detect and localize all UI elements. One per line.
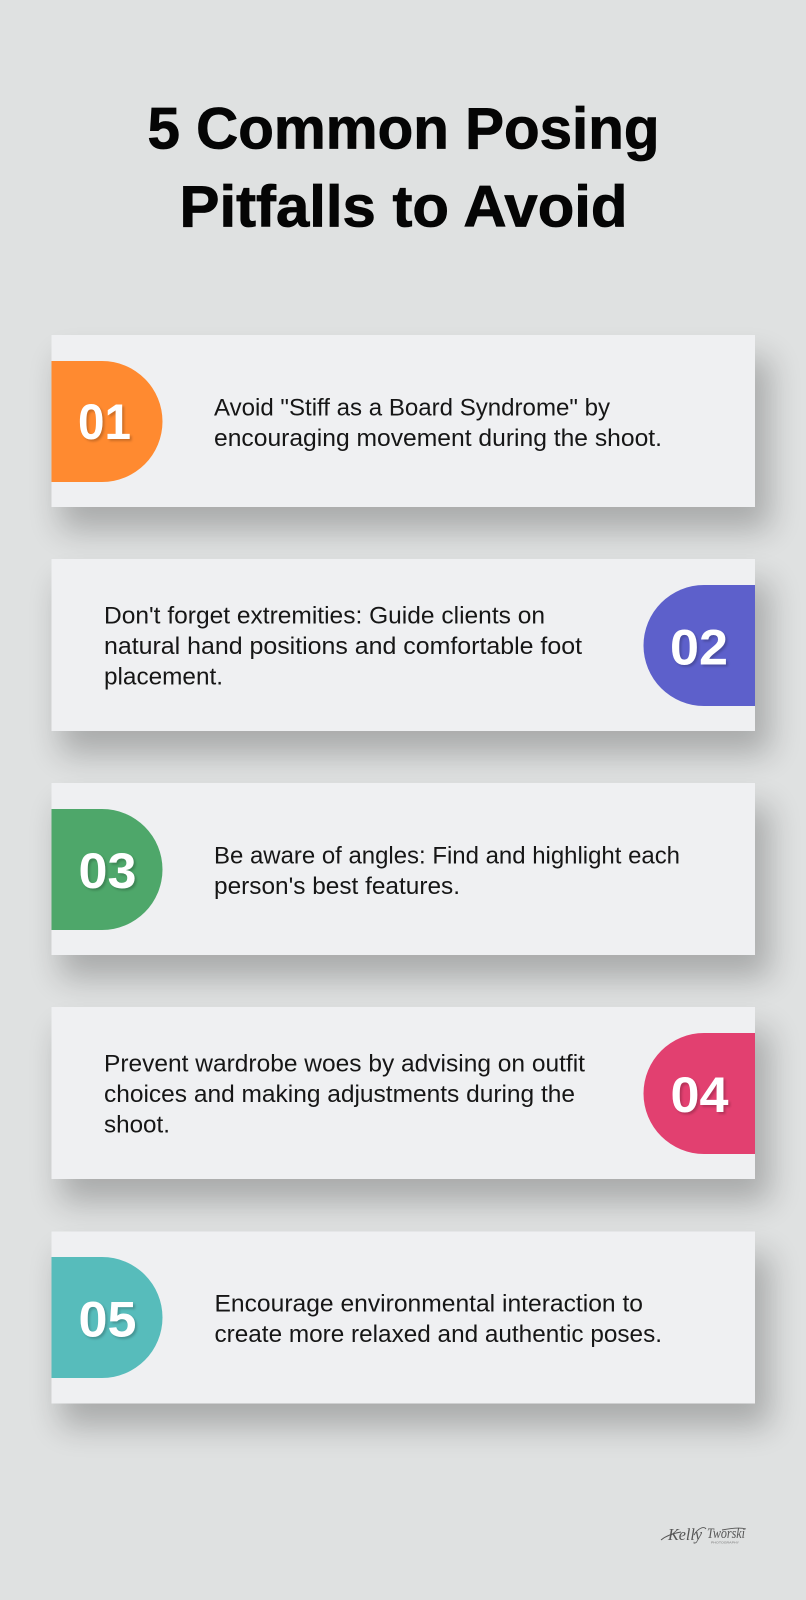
text: step 04 <box>104 1050 585 1138</box>
text: step 02: placement. <box>104 664 223 690</box>
panel: step 05 <box>52 1232 770 1426</box>
panel: step 04 <box>52 1007 770 1202</box>
text: step 04: choices and making adjustments during the <box>104 1081 575 1108</box>
title: Pitfalls to Avoid <box>180 175 628 240</box>
number: 03: 03 <box>78 843 136 899</box>
number: 02: 02 <box>670 620 728 676</box>
text: step 04: shoot. <box>104 1112 170 1138</box>
title: 5 Common Posing <box>148 96 660 161</box>
text: step 03 <box>214 842 680 900</box>
text: step 03: person's best features. <box>214 873 460 900</box>
logo: signature <box>661 1525 746 1544</box>
badge: 01 <box>52 361 162 482</box>
logo: signature: Tworski <box>707 1526 745 1542</box>
badge: 04 <box>643 1033 755 1154</box>
text: step 05: create more relaxed and authentic poses. <box>214 1321 662 1348</box>
panel: step 02 <box>52 559 770 754</box>
number: 05: 05 <box>78 1292 136 1348</box>
text: step 01: encouraging movement during the shoot. <box>214 425 662 452</box>
badge: 05 <box>52 1257 162 1378</box>
text: step 05: Encourage environmental interaction to <box>214 1290 643 1318</box>
panel: step 01 <box>52 335 770 530</box>
text: step 02 <box>104 602 582 690</box>
text: step 04: Prevent wardrobe woes by advising on outfit <box>104 1050 585 1078</box>
badge: 02 <box>643 585 755 706</box>
text: step 02: natural hand positions and comfortable foot <box>104 633 582 660</box>
number: 04: 04 <box>670 1067 729 1123</box>
text: step 01 <box>214 394 662 452</box>
title <box>148 96 660 240</box>
logo: signature: PHOTOGRAPHY <box>711 1540 739 1544</box>
text: step 03: Be aware of angles: Find and highlight each <box>214 842 680 870</box>
logo: signature: Kelly <box>667 1525 702 1544</box>
badge: 03 <box>52 809 162 930</box>
text: step 05 <box>214 1290 662 1348</box>
panel: step 03 <box>52 783 770 978</box>
text: step 02: Don't forget extremities: Guide clients on <box>104 602 545 630</box>
number: 01: 01 <box>78 394 131 450</box>
text: step 01: Avoid "Stiff as a Board Syndrome" by <box>214 394 610 422</box>
